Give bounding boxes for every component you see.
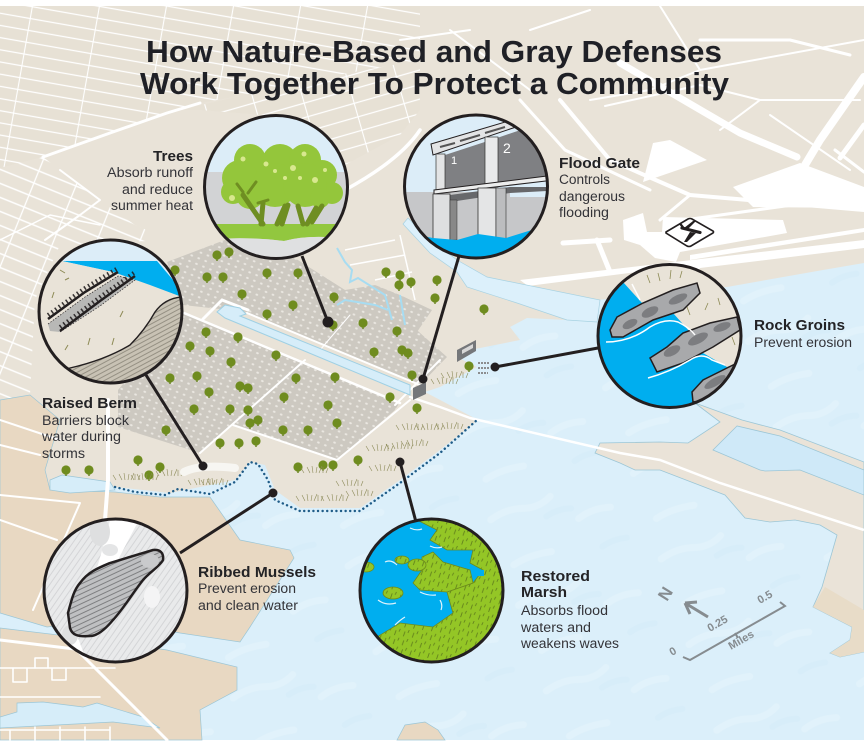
label: raised berm: water during (41, 429, 121, 444)
title: How Nature-Based and Gray Defenses (146, 34, 722, 69)
label: ribbed mussels: Prevent erosion (198, 581, 296, 596)
label: raised berm (41, 395, 137, 461)
north arrow and scale bar: N (654, 584, 677, 604)
label: flood gate: Controls (559, 172, 610, 187)
map: northern land (0, 6, 864, 508)
callout lines (146, 256, 598, 553)
north arrow and scale bar: 0.5 (756, 589, 775, 607)
community: northeast gray block (345, 285, 432, 335)
north arrow and scale bar: Miles (726, 628, 756, 653)
community: lower gray neighborhood (118, 313, 400, 460)
label: flood gate: dangerous (559, 189, 625, 204)
circle: flood gate: 1 (451, 155, 457, 167)
label: rock groins (754, 317, 852, 350)
circle: flood gate (403, 114, 549, 260)
rock groins on map (478, 363, 490, 373)
label: ribbed mussels: Ribbed Mussels (198, 564, 316, 581)
label: restored marsh (520, 568, 619, 651)
map: main roads on the west side (0, 103, 420, 240)
trees on map (61, 247, 489, 481)
label: trees: summer heat (111, 198, 193, 213)
label: flood gate: Flood Gate (559, 155, 640, 172)
label: ribbed mussels: and clean water (198, 598, 299, 613)
north arrow and scale bar: 0 (668, 645, 679, 659)
label: trees: Trees (153, 148, 193, 165)
label: raised berm: storms (42, 446, 85, 461)
map: tan shoreline southwest (0, 395, 445, 740)
circle: ribbed mussels (40, 515, 192, 670)
label: restored marsh: waters and (520, 620, 591, 635)
north arrow and scale bar: 0.25 (706, 613, 730, 635)
north arrow and scale bar (654, 584, 785, 660)
circle: trees (203, 113, 349, 262)
label: raised berm: Barriers block (42, 413, 129, 428)
label: restored marsh: Absorbs flood (521, 603, 608, 618)
label: rock groins: Rock Groins (754, 317, 845, 334)
community: road lines (184, 300, 470, 460)
circle: rock groins (595, 260, 745, 410)
map: tan southern end of spit (813, 587, 864, 657)
map: river and bay north of the community (403, 218, 600, 322)
label: flood gate (559, 155, 640, 220)
grass tufts on map (113, 371, 468, 501)
creek (337, 248, 405, 325)
raised berm on map (184, 467, 235, 472)
label: trees: and reduce (122, 182, 193, 197)
circle: flood gate: 2 (503, 140, 511, 156)
label: ribbed mussels (198, 564, 316, 613)
airport icon (666, 218, 714, 246)
label: restored marsh: weakens waves (520, 636, 619, 651)
canal (217, 305, 410, 395)
label: restored marsh: Marsh (521, 584, 567, 601)
label: trees: Absorb runoff (107, 165, 193, 180)
flood gate structures on map (413, 340, 476, 400)
label: trees (107, 148, 193, 213)
community: upper gray neighborhood (167, 238, 447, 385)
title (140, 34, 730, 101)
lagoon (713, 426, 864, 495)
label: flood gate: flooding (559, 205, 609, 220)
title: Work Together To Protect a Community (140, 66, 730, 101)
map: barrier spit (470, 403, 864, 657)
circle: raised berm (38, 238, 184, 384)
label: rock groins: Prevent erosion (754, 335, 852, 350)
ribbed mussel reef dotted line (115, 420, 477, 511)
map: southwest roads (0, 400, 167, 740)
label: restored marsh: Restored (521, 568, 590, 585)
label: raised berm: Raised Berm (42, 395, 137, 412)
circle: restored marsh (358, 518, 504, 664)
map: airport and highways (520, 140, 864, 290)
